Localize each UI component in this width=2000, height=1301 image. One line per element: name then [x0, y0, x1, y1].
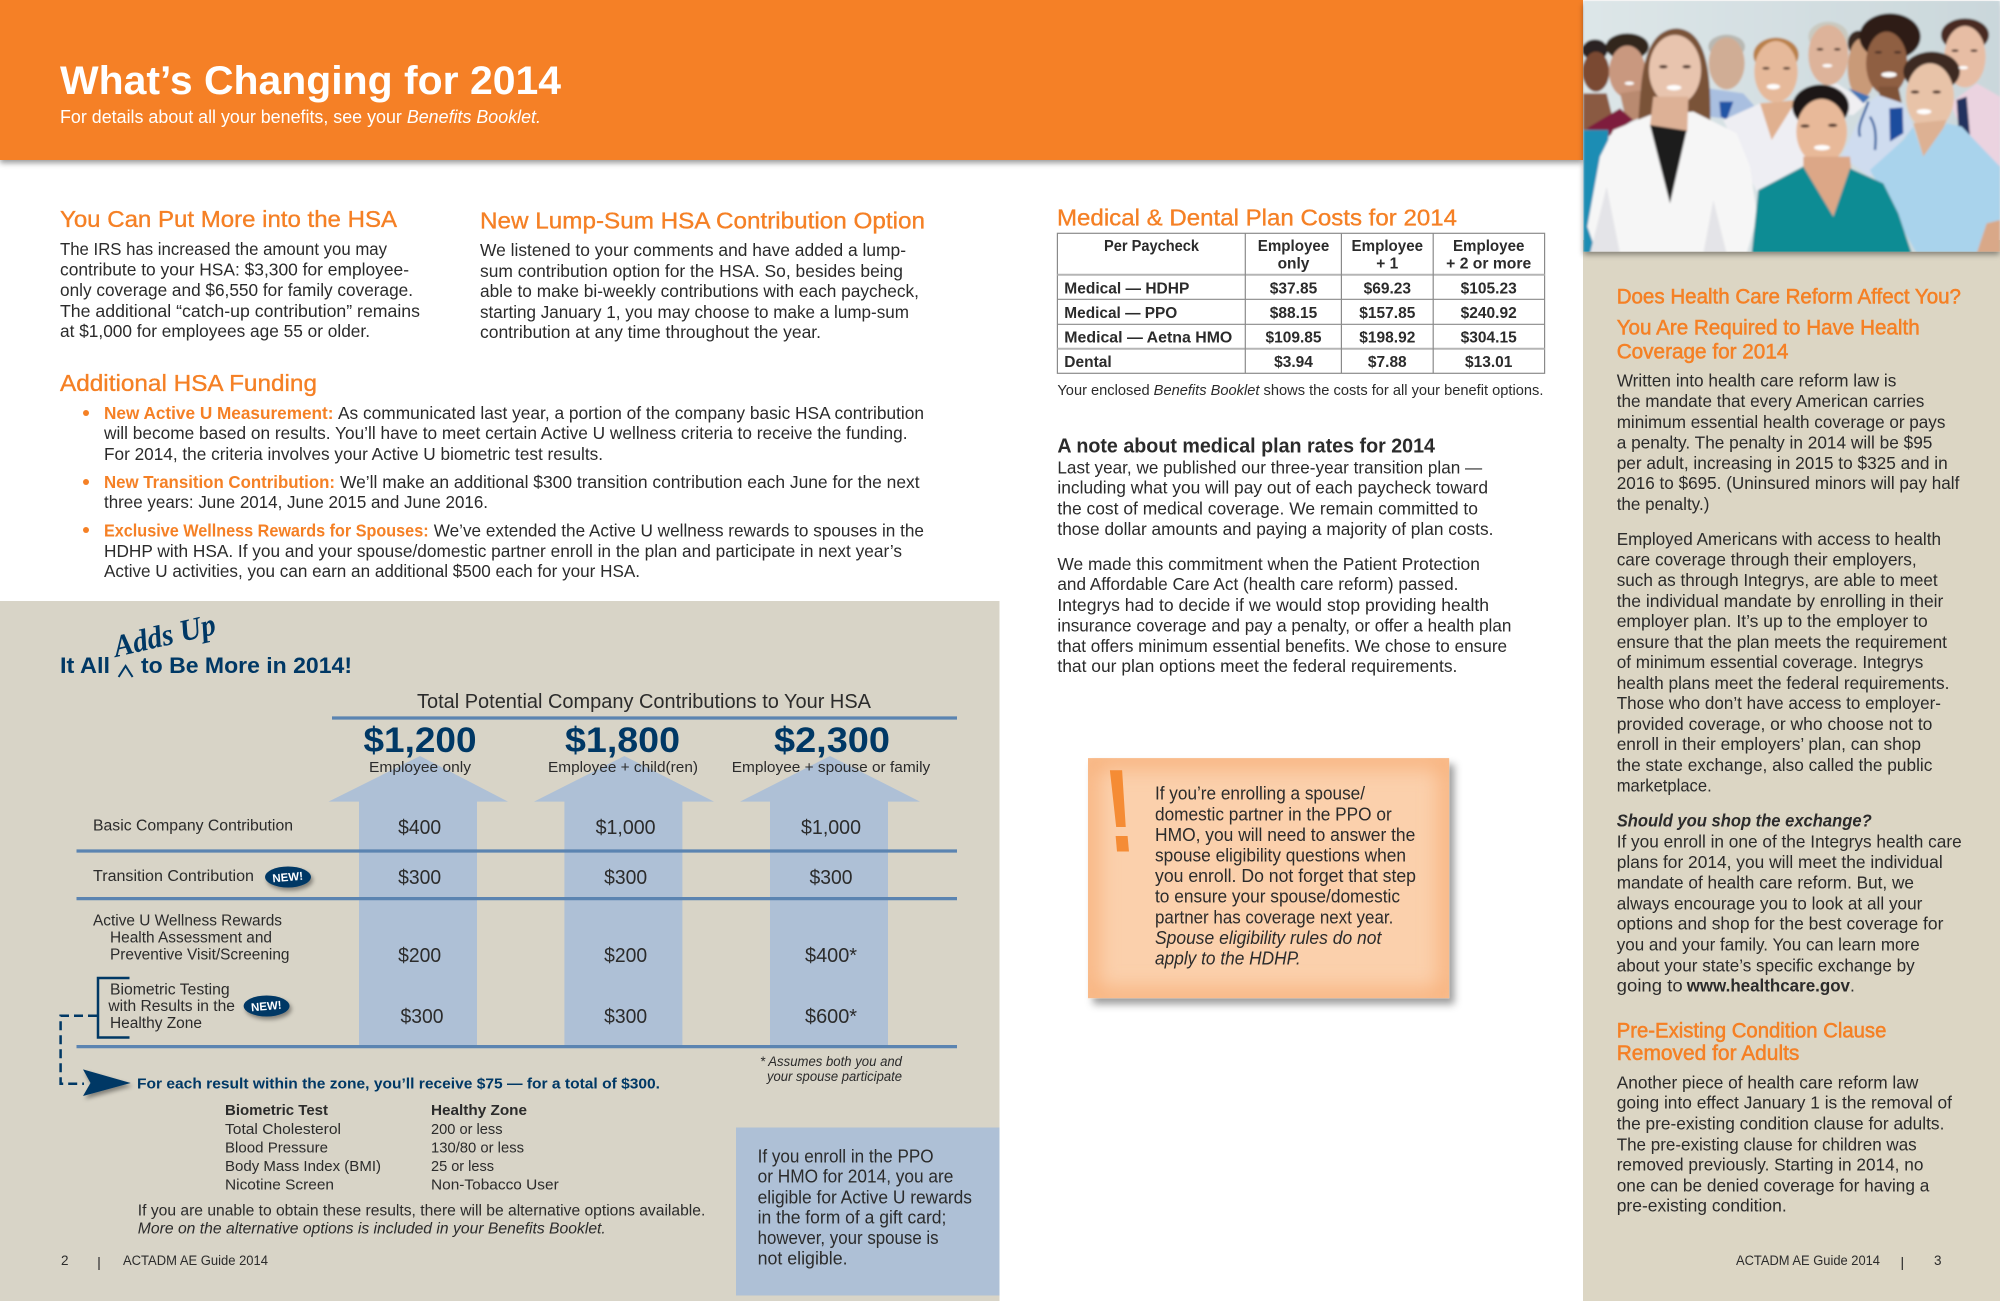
heading: plan costs: Medical & Dental Plan Costs for 2014 — [1057, 205, 1457, 231]
heading: rates note: A note about medical plan rates for 2014 — [1057, 435, 1436, 457]
subtitle: For details about all your benefits, see your Benefits Booklet. — [60, 106, 541, 127]
header band — [0, 0, 1583, 160]
chart heading: Total Potential Company Contributions to Your HSA — [417, 691, 872, 713]
row labels: Healthy Zone — [110, 1015, 202, 1032]
row labels: Health Assessment and — [110, 929, 272, 946]
row labels: Transition Contribution — [93, 868, 254, 885]
text block: Additional HSA Funding: For 2014, the criteria involves your Active U biometric test results. — [104, 444, 603, 464]
heading: should you shop the exchange: Should you shop the exchange? — [1617, 811, 1872, 831]
text block: note about medical plan rates: the cost of medical coverage. We remain committed to — [1057, 498, 1478, 518]
table note: Your enclosed Benefits Booklet shows the costs for all your benefit options. — [1057, 383, 1543, 399]
text block: Additional HSA Funding: Active U activities, you can earn an additional $500 each for your HSA. — [104, 561, 640, 581]
table: plan costs: Employee — [1258, 238, 1330, 255]
text block: You Can Put More into the HSA: at $1,000 for employees age 55 or older. — [60, 321, 370, 341]
callout: spouse eligibility: apply to the HDHP. — [1155, 949, 1301, 969]
table: plan costs: Medical — Aetna HMO — [1064, 329, 1232, 346]
biometric table: Healthy Zone — [431, 1102, 527, 1119]
contribution values: $200 — [604, 945, 647, 967]
contribution values: $300 — [604, 1006, 647, 1028]
footnote — [760, 1054, 902, 1084]
text block: note about medical plan rates: and Affordable Care Act (health care reform) passed. — [1057, 574, 1458, 594]
sidebar text: health care reform — [1617, 284, 1962, 995]
sidebar text: pre-existing condition: removed previously. Starting in 2014, no — [1617, 1154, 1923, 1174]
biometric table: Body Mass Index (BMI) — [225, 1158, 381, 1175]
table: plan costs: Medical — HDHP — [1064, 280, 1189, 297]
arrow: result pointer — [83, 1069, 131, 1096]
panel: gift card note: however, your spouse is — [758, 1228, 939, 1248]
sidebar text: health care reform: 2016 to $695. (Uninsured minors will pay half — [1617, 473, 1960, 493]
badge: new transition — [265, 866, 311, 888]
table: plan costs — [1057, 233, 1545, 373]
sidebar text: health care reform: Those who don’t have access to employer- — [1617, 693, 1941, 713]
row labels: Active U Wellness Rewards — [93, 912, 282, 929]
sidebar text: health care reform: such as through Integrys, are able to meet — [1617, 570, 1938, 590]
panel: gift card note — [736, 1128, 1000, 1296]
sidebar text: health care reform: health plans meet the federal requirements. — [1617, 673, 1949, 693]
biometric table: Blood Pressure — [225, 1140, 328, 1156]
row labels — [93, 818, 293, 1032]
table: plan costs: $304.15 — [1461, 329, 1517, 346]
table: plan costs: $109.85 — [1265, 329, 1322, 346]
heading: required coverage: You Are Required to Have Health — [1617, 316, 1920, 340]
sidebar text: health care reform: . — [1850, 975, 1855, 995]
sidebar text: health care reform: mandate of health care reform. But, we — [1617, 872, 1914, 892]
heading: It All Adds Up: It All — [60, 653, 110, 678]
table: plan costs: Dental — [1064, 354, 1112, 371]
callout: spouse eligibility: If you’re enrolling a spouse/ — [1155, 783, 1365, 803]
text block: You Can Put More into the HSA: contribute to your HSA: $3,300 for employee- — [60, 260, 409, 280]
sidebar text: pre-existing condition: The pre-existing clause for children was — [1617, 1134, 1917, 1154]
heading: pre-existing: Pre-Existing Condition Clause — [1617, 1018, 1886, 1042]
text block: note about medical plan rates — [1057, 435, 1511, 676]
panel: gift card note: If you enroll in the PPO — [758, 1146, 934, 1166]
contribution values — [398, 817, 861, 1028]
sidebar text: health care reform: a penalty. The penalty in 2014 will be $95 — [1617, 432, 1932, 452]
sidebar text: health care reform: the mandate that every American carries — [1617, 391, 1925, 411]
contribution values: $300 — [398, 867, 441, 889]
contribution values: $400 — [398, 817, 441, 839]
sidebar text: health care reform: about your state’s specific exchange by — [1617, 955, 1915, 975]
text block: note about medical plan rates: We made this commitment when the Patient Protection — [1057, 554, 1480, 574]
text block: note about medical plan rates: those dollar amounts and paying a majority of plan costs. — [1057, 519, 1493, 539]
sidebar text: health care reform: minimum essential health coverage or pays — [1617, 412, 1946, 432]
table: plan costs: $240.92 — [1461, 305, 1517, 322]
table: plan costs: + 1 — [1376, 255, 1399, 272]
text block: note about medical plan rates: Last year, we published our three-year transition plan — — [1057, 457, 1483, 477]
footer: left page: 2 — [61, 1253, 69, 1268]
text block: Additional HSA Funding: As communicated last year, a portion of the company basic HSA contribution — [338, 403, 924, 423]
sidebar text: health care reform: employer plan. It’s up to the employer to — [1617, 611, 1928, 631]
text block: New Lump-Sum HSA Contribution Option: starting January 1, you may choose to make a lump-sum — [480, 302, 909, 322]
arrow: employee plus spouse — [740, 756, 920, 1046]
bracket — [98, 978, 130, 1038]
title: What’s Changing for 2014 — [60, 59, 562, 103]
table: plan costs: $198.92 — [1359, 329, 1415, 346]
text block: Additional HSA Funding: We’ll make an additional $300 transition contribution each June for the next — [340, 472, 920, 492]
sidebar text: health care reform: options and shop for the best coverage for — [1617, 913, 1944, 933]
sidebar text: health care reform: the state exchange, also called the public — [1617, 755, 1933, 775]
table: plan costs: Medical — PPO — [1064, 305, 1177, 322]
badge: new biometric: NEW! — [251, 1000, 282, 1014]
heading: funding: Additional HSA Funding — [60, 370, 317, 396]
sidebar text: pre-existing condition: the pre-existing condition clause for adults. — [1617, 1113, 1944, 1133]
text block: New Lump-Sum HSA Contribution Option: sum contribution option for the HSA. So, besides being — [480, 261, 903, 281]
row labels: Basic Company Contribution — [93, 818, 293, 835]
sidebar text: health care reform: of minimum essential coverage. Integrys — [1617, 652, 1924, 672]
sidebar text: health care reform: ensure that the plan meets the requirement — [1617, 632, 1947, 652]
callout: spouse eligibility — [1088, 745, 1449, 998]
totals: $2,300 — [774, 721, 890, 760]
sidebar text: health care reform: Employed Americans with access to health — [1617, 529, 1941, 549]
sidebar text: health care reform: the individual mandate by enrolling in their — [1617, 591, 1944, 611]
row labels: Preventive Visit/Screening — [110, 946, 290, 963]
callout: spouse eligibility: you enroll. Do not forget that step — [1155, 866, 1416, 886]
text block: You Can Put More into the HSA: The additional “catch-up contribution” remains — [60, 301, 420, 321]
callout: spouse eligibility: to ensure your spouse/domestic — [1155, 887, 1400, 907]
table: plan costs: Per Paycheck — [1104, 238, 1199, 255]
callout: spouse eligibility: HMO, you will need to answer the — [1155, 825, 1415, 845]
footer: left page: ACTADM AE Guide 2014 — [123, 1253, 268, 1268]
table: plan costs: only — [1278, 255, 1310, 272]
text block: New Lump-Sum HSA Contribution Option — [480, 208, 925, 342]
table: plan costs: + 2 or more — [1446, 255, 1532, 272]
biometric table: 130/80 or less — [431, 1140, 524, 1156]
biometric table: Nicotine Screen — [225, 1177, 334, 1194]
panel: It All Adds Up — [0, 601, 1000, 1301]
callout: spouse eligibility: domestic partner in the PPO or — [1155, 805, 1392, 825]
note: alternative options: If you are unable to obtain these results, there will be alternative options available. — [138, 1203, 705, 1220]
table: plan costs: $7.88 — [1368, 354, 1407, 371]
biometric table: 25 or less — [431, 1158, 494, 1175]
panel: gift card note: not eligible. — [758, 1248, 848, 1268]
table: plan costs: $37.85 — [1270, 280, 1318, 297]
biometric table: Total Cholesterol — [225, 1121, 341, 1138]
callout: spouse eligibility: spouse eligibility questions when — [1155, 846, 1406, 866]
arrow: employee only — [328, 756, 508, 1046]
totals: $1,800 — [565, 721, 680, 760]
text block: Additional HSA Funding: Exclusive Wellness Rewards for Spouses: — [104, 520, 429, 540]
text block: New Lump-Sum HSA Contribution Option: contribution at any time throughout the year. — [480, 322, 821, 342]
totals: Employee + child(ren) — [548, 760, 698, 776]
icon: exclamation mark: ! — [1100, 745, 1139, 877]
heading: lump-sum: New Lump-Sum HSA Contribution Option — [480, 208, 925, 234]
sidebar text: health care reform: provided coverage, or who choose not to — [1617, 714, 1932, 734]
totals — [364, 721, 931, 776]
photo: group of healthcare workers — [1582, 0, 2000, 253]
biometric table — [225, 1102, 559, 1194]
table: plan costs: $3.94 — [1274, 354, 1313, 371]
callout text: result: For each result within the zone, you’ll receive $75 — for a total of $300. — [137, 1076, 660, 1093]
totals: Employee + spouse or family — [732, 760, 931, 776]
table: plan costs: $105.23 — [1461, 280, 1517, 297]
text block: You Can Put More into the HSA: The IRS has increased the amount you may — [60, 239, 387, 259]
contribution values: $400* — [805, 945, 857, 967]
panel: gift card note: eligible for Active U rewards — [758, 1188, 972, 1208]
sidebar text: health care reform: care coverage through their employers, — [1617, 550, 1917, 570]
sidebar text: health care reform: Written into health care reform law is — [1617, 371, 1897, 391]
contribution values: $300 — [400, 1006, 444, 1028]
sidebar text: health care reform: always encourage you to look at all your — [1617, 893, 1923, 913]
footnote: your spouse participate — [766, 1069, 902, 1084]
text block: Additional HSA Funding: three years: June 2014, June 2015 and June 2016. — [104, 492, 488, 512]
biometric table: Non-Tobacco User — [431, 1177, 559, 1194]
panel: medical and dental plan costs — [1057, 205, 1545, 399]
contribution values: $600* — [805, 1006, 857, 1028]
sidebar text: pre-existing condition: Another piece of health care reform law — [1617, 1072, 1919, 1092]
heading: HSA: You Can Put More into the HSA — [60, 206, 397, 232]
text block: Additional HSA Funding: will become based on results. You’ll have to meet certain Active U wellness criteria to receive the funding. — [103, 423, 908, 443]
biometric table: Biometric Test — [225, 1102, 328, 1119]
sidebar text: pre-existing condition: pre-existing condition. — [1617, 1196, 1787, 1216]
row labels: Biometric Testing — [110, 982, 230, 999]
heading: It All Adds Up — [60, 606, 352, 678]
text block: note about medical plan rates: that offers minimum essential benefits. We chose to ensure — [1057, 636, 1507, 656]
callout: spouse eligibility: partner has coverage next year. — [1155, 907, 1393, 927]
text block: You Can Put More into the HSA: only coverage and $6,550 for family coverage. — [60, 280, 413, 300]
sidebar text: pre-existing condition: going into effect January 1 is the removal of — [1617, 1092, 1952, 1112]
text block: note about medical plan rates: including what you will pay out of each paycheck toward — [1057, 477, 1488, 497]
panel: gift card note: in the form of a gift card; — [758, 1208, 946, 1228]
text block: note about medical plan rates: that our plan options meet the federal requirements. — [1057, 656, 1457, 676]
sidebar text: health care reform: per adult, increasing in 2015 to $325 and in — [1617, 453, 1948, 473]
text block: Additional HSA Funding: We’ve extended the Active U wellness rewards to spouses in the — [434, 520, 924, 540]
heading: required coverage — [1617, 316, 1920, 363]
biometric table: 200 or less — [431, 1121, 502, 1138]
badge: new transition: NEW! — [272, 871, 304, 885]
heading: pre-existing: Removed for Adults — [1617, 1041, 1799, 1065]
contribution values: $200 — [398, 945, 441, 967]
sidebar text: health care reform: you and your family. You can learn more — [1617, 934, 1920, 954]
footer: left page — [61, 1253, 268, 1270]
heading: pre-existing — [1617, 1018, 1886, 1065]
sidebar text: health care reform: going to — [1617, 975, 1683, 995]
heading: does reform affect you: Does Health Care Reform Affect You? — [1617, 284, 1961, 308]
table: plan costs: Employee — [1453, 238, 1525, 255]
contribution values: $1,000 — [801, 817, 861, 839]
text block: note about medical plan rates: insurance coverage and pay a penalty, or offer a health plan — [1057, 615, 1511, 635]
table: plan costs: $69.23 — [1364, 280, 1411, 297]
arrow: employee plus children — [534, 756, 714, 1046]
heading: required coverage: Coverage for 2014 — [1617, 339, 1788, 363]
sidebar text: health care reform: www.healthcare.gov — [1686, 975, 1850, 995]
sidebar text: health care reform: If you enroll in one of the Integrys health care — [1617, 831, 1962, 851]
text block: note about medical plan rates: Integrys had to decide if we would stop providing health — [1057, 595, 1489, 615]
contribution values: $1,000 — [596, 817, 656, 839]
text block: Additional HSA Funding: HDHP with HSA. If you and your spouse/domestic partner enroll in the plan and participate in next year’s — [104, 541, 902, 561]
sidebar text: health care reform: enroll in their employers’ plan, can shop — [1617, 734, 1921, 754]
text block: You Can Put More into the HSA — [60, 206, 420, 341]
text block: New Lump-Sum HSA Contribution Option: We listened to your comments and have added a lump- — [480, 240, 906, 260]
heading: It All Adds Up: to Be More in 2014! — [141, 653, 352, 678]
totals: $1,200 — [364, 721, 476, 760]
footer: right page — [1736, 1253, 1942, 1270]
footer: right page: 3 — [1934, 1253, 1942, 1268]
table: plan costs: $88.15 — [1270, 305, 1318, 322]
text block: Additional HSA Funding — [60, 370, 924, 581]
contribution values: $300 — [604, 867, 647, 889]
panel: sidebar background — [1583, 240, 2000, 1301]
totals: Employee only — [369, 760, 472, 776]
text block: Additional HSA Funding: New Transition Contribution: — [104, 472, 335, 492]
panel: gift card note: or HMO for 2014, you are — [758, 1166, 953, 1186]
sidebar text: health care reform: the penalty.) — [1617, 494, 1709, 514]
footnote: * Assumes both you and — [760, 1054, 902, 1069]
heading: It All Adds Up: Adds Up — [108, 606, 219, 664]
table: plan costs: $157.85 — [1359, 305, 1416, 322]
sidebar text: health care reform: plans for 2014, you will meet the individual — [1617, 852, 1943, 872]
sidebar text: health care reform: marketplace. — [1617, 776, 1712, 796]
callout: spouse eligibility: Spouse eligibility rules do not — [1155, 928, 1382, 948]
sidebar text: pre-existing condition: one can be denied coverage for having a — [1617, 1175, 1930, 1195]
note: alternative options: More on the alternative options is included in your Benefits Booklet. — [138, 1220, 606, 1237]
table: plan costs: $13.01 — [1465, 354, 1513, 371]
dashed connector — [61, 1016, 97, 1084]
note: alternative options — [138, 1203, 705, 1237]
row labels: with Results in the — [107, 998, 235, 1015]
contribution values: $300 — [810, 867, 852, 889]
sidebar text: pre-existing condition — [1617, 1018, 1952, 1216]
text block: Additional HSA Funding: New Active U Measurement: — [104, 403, 334, 423]
text block: New Lump-Sum HSA Contribution Option: able to make bi-weekly contributions with each paycheck, — [480, 281, 919, 301]
footer: right page: ACTADM AE Guide 2014 — [1736, 1253, 1880, 1268]
table: plan costs: Employee — [1352, 238, 1423, 255]
badge: new biometric — [244, 996, 290, 1016]
